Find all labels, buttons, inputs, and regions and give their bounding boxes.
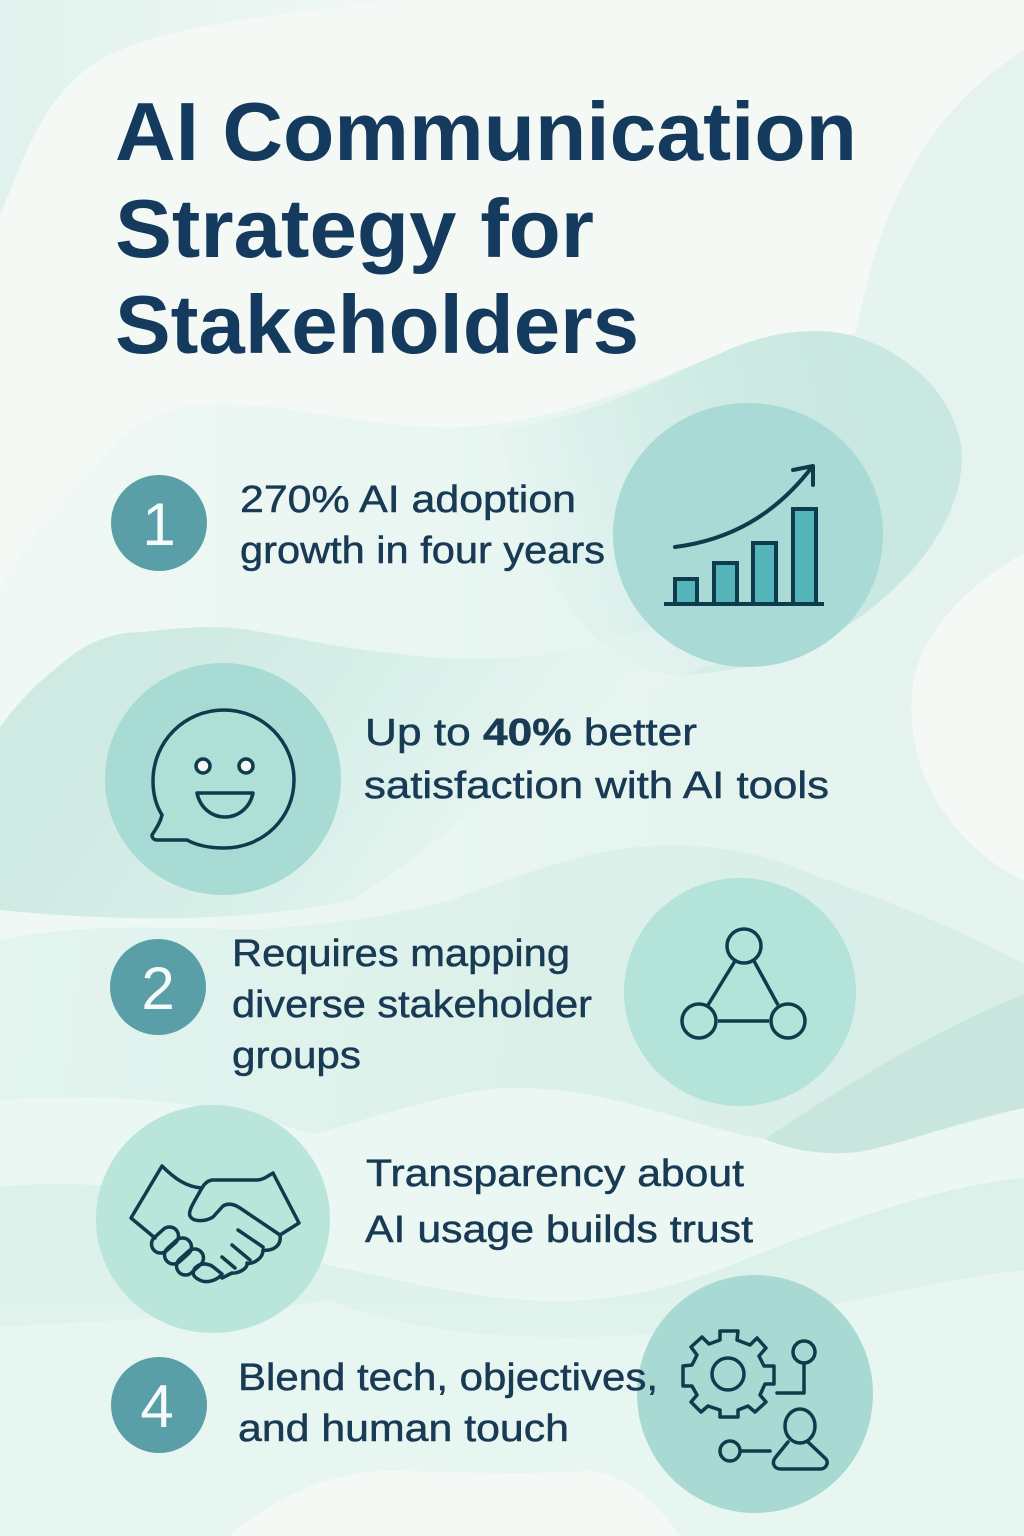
item 3: network triangle icon: [624, 878, 856, 1106]
item 3: number badge: 2: [141, 955, 175, 1022]
item 3: text: diverse stakeholder: [232, 984, 592, 1026]
item 4: text: AI usage builds trust: [365, 1209, 753, 1251]
item 5: number badge: [111, 1357, 207, 1453]
item 1: number badge: 1: [142, 491, 176, 558]
item 5: text: [238, 1357, 658, 1450]
title: [115, 85, 857, 371]
item 5: number badge: 4: [140, 1373, 174, 1440]
item 2: text: satisfaction with AI tools: [364, 765, 829, 807]
title: AI Communication: [115, 85, 857, 178]
item 2: text: Up to 40% better: [365, 712, 697, 754]
item 1: text: [240, 479, 605, 572]
item 5: tech and people icon: [637, 1275, 873, 1513]
item 4: text: Transparency about: [366, 1153, 744, 1195]
item 2: text: [364, 712, 829, 807]
item 1: number badge: [111, 475, 207, 571]
item 3: text: groups: [232, 1035, 361, 1077]
item 3: text: [232, 933, 592, 1077]
item 5: text: and human touch: [238, 1408, 569, 1450]
item 3: text: Requires mapping: [232, 933, 570, 975]
title: Strategy for: [115, 182, 594, 275]
item 1: text: growth in four years: [240, 530, 605, 572]
item 2: smiley chat icon: [105, 663, 341, 895]
item 3: number badge: [110, 939, 206, 1035]
title: Stakeholders: [115, 278, 639, 371]
item 4: text: [365, 1153, 753, 1251]
item 5: text: Blend tech, objectives,: [238, 1357, 658, 1399]
item 1: text: 270% AI adoption: [240, 479, 576, 521]
item 4: handshake icon: [96, 1105, 330, 1333]
item 1: growth chart icon: [613, 403, 883, 667]
